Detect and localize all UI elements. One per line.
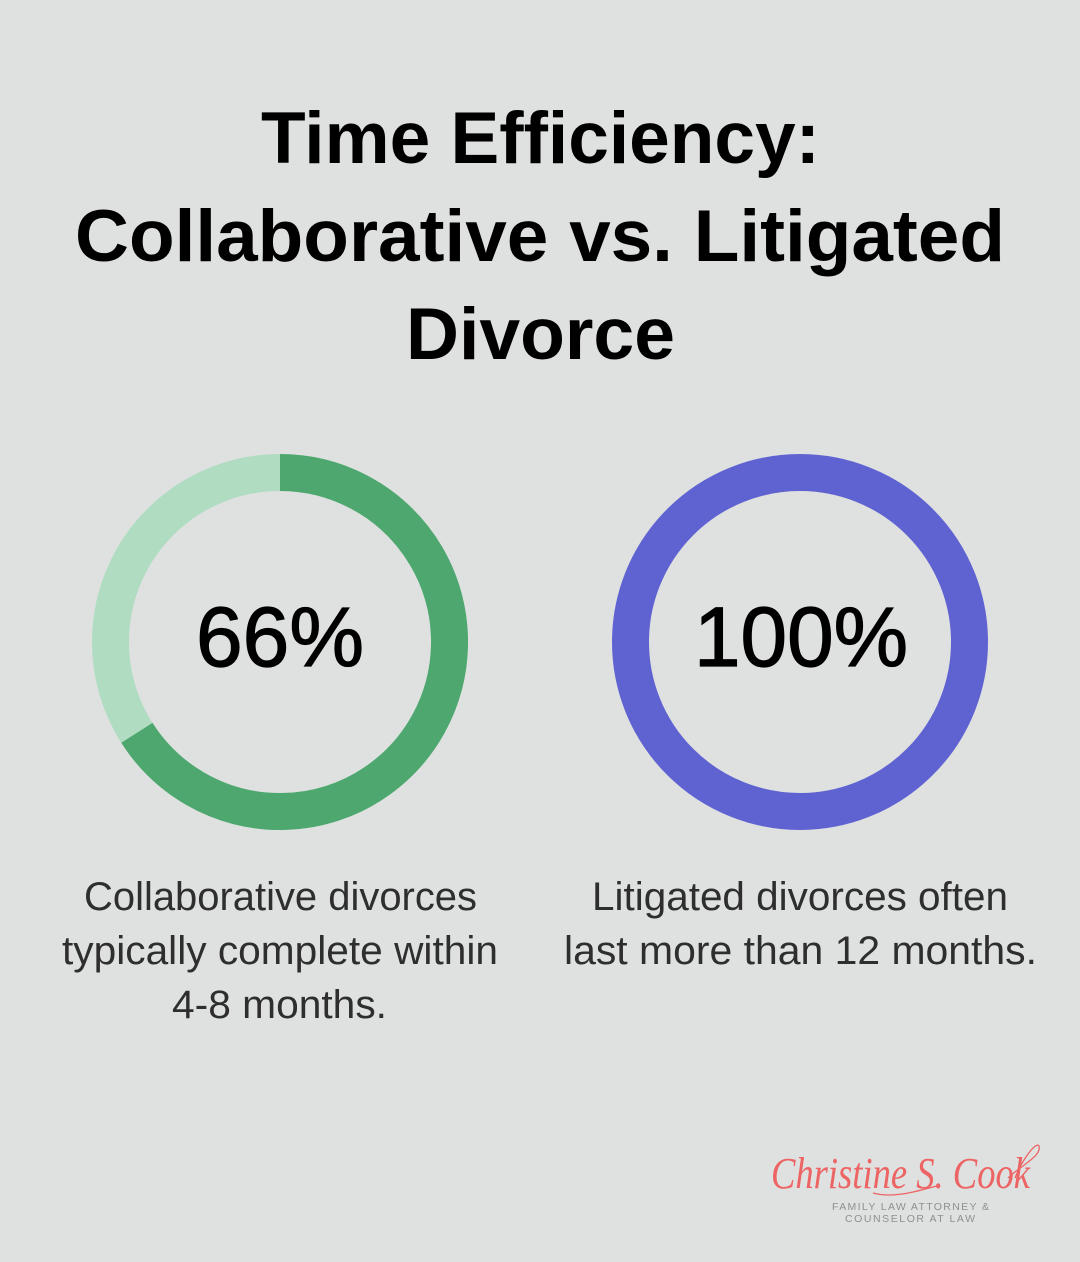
title <box>75 98 1005 375</box>
description: litigated: last more than 12 months. <box>564 929 1037 973</box>
logo: Christine S. Cook <box>771 1145 1039 1225</box>
logo: Christine S. Cook: FAMILY LAW ATTORNEY & <box>832 1201 989 1213</box>
description: litigated <box>564 875 1037 973</box>
description: litigated: Litigated divorces often <box>592 875 1008 919</box>
logo: Christine S. Cook: Christine S. Cook <box>771 1149 1031 1198</box>
donut chart: 100% <box>630 472 970 812</box>
description: collaborative: 4-8 months. <box>172 983 387 1027</box>
stat: 100%: 100% <box>694 590 908 684</box>
description: collaborative: Collaborative divorces <box>84 875 477 919</box>
panel: litigated divorce <box>564 472 1037 973</box>
logo: Christine S. Cook: COUNSELOR AT LAW <box>845 1213 975 1225</box>
title: Collaborative vs. Litigated <box>75 196 1005 277</box>
description: collaborative: typically complete within <box>62 929 498 973</box>
description: collaborative <box>62 875 498 1027</box>
title: Time Efficiency: <box>261 98 820 179</box>
stat: 66%: 66% <box>196 590 364 684</box>
panel: collaborative divorce <box>62 472 498 1027</box>
title: Divorce <box>406 294 675 375</box>
donut chart: 66% <box>110 472 450 812</box>
